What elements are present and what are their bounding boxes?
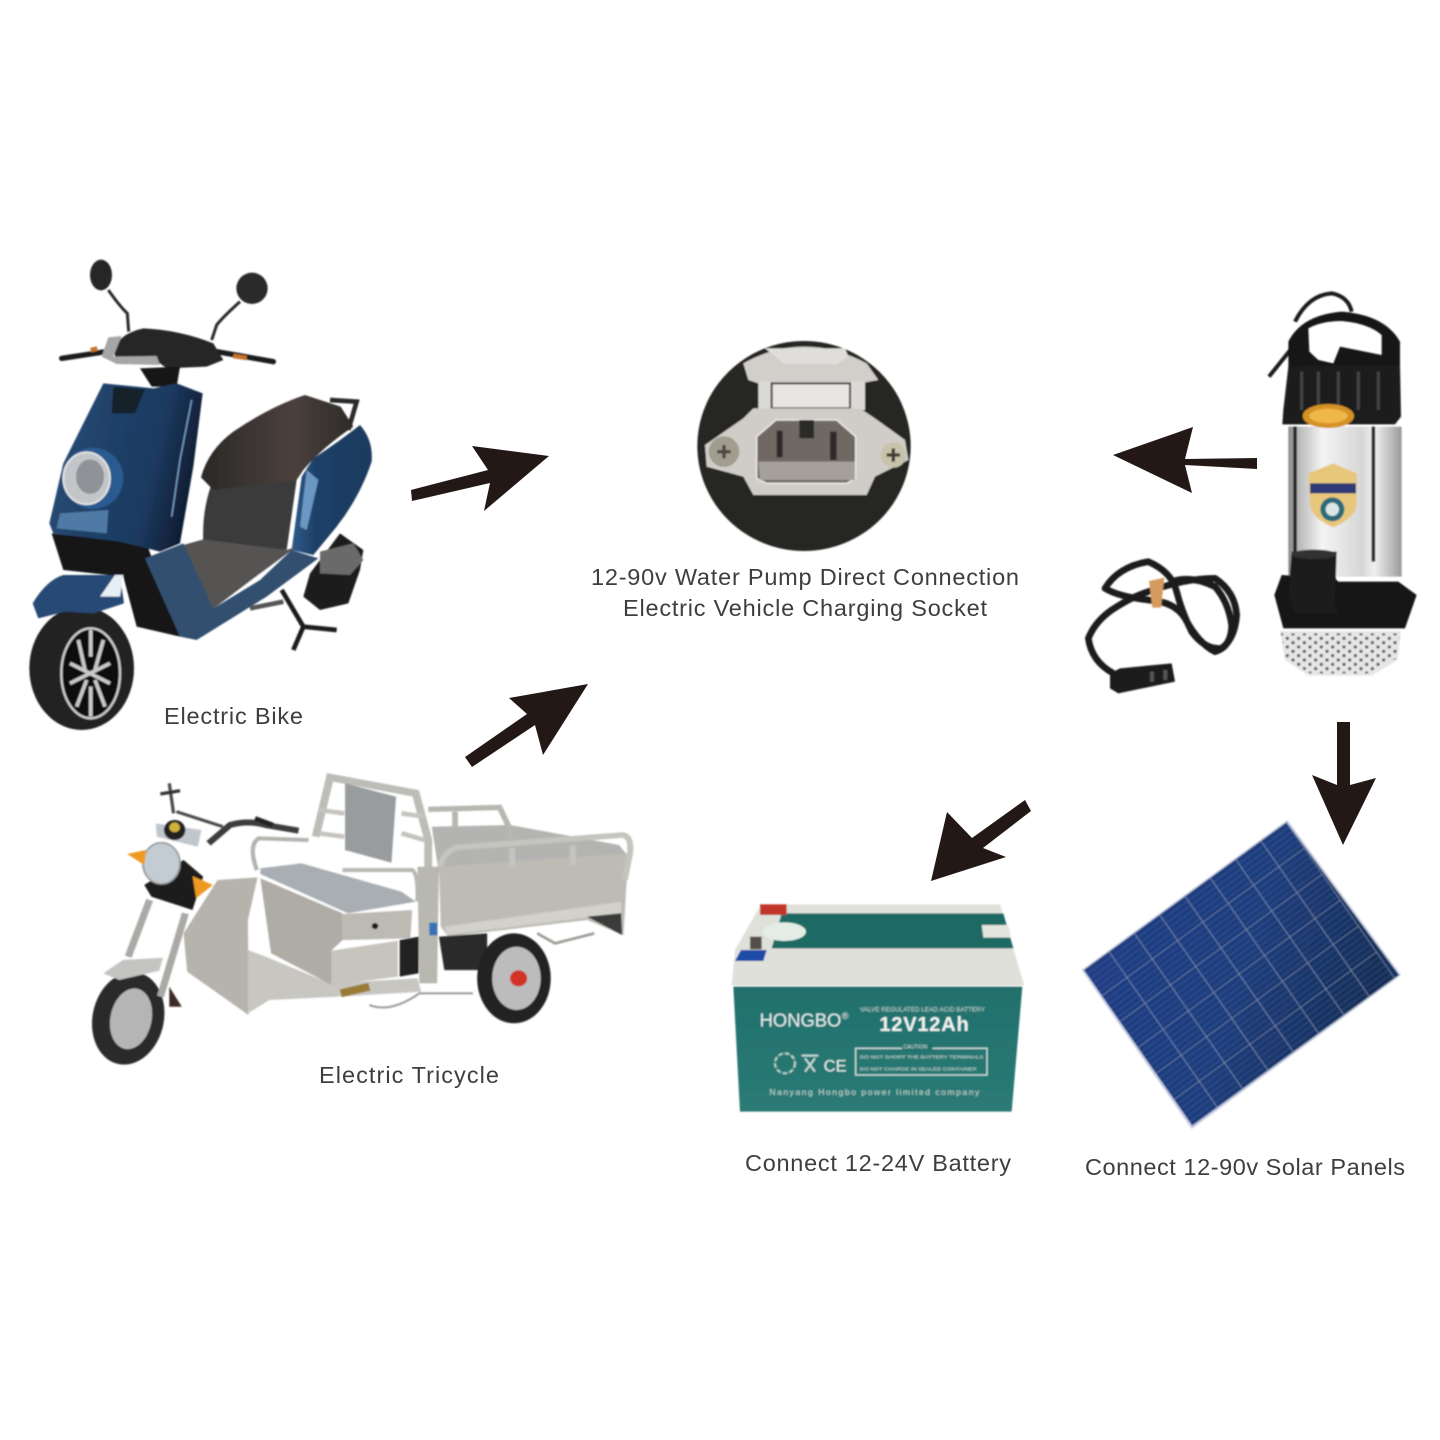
- arrow: pump to socket: [1113, 427, 1257, 493]
- socket opening: [757, 420, 856, 483]
- compliance icons: CE: [824, 1057, 847, 1076]
- shield badge: [1308, 463, 1357, 527]
- icon: electric bike: [29, 260, 372, 730]
- lid: [743, 347, 878, 383]
- label: battery: Connect 12-24V Battery: [745, 1150, 1011, 1176]
- floorboard: [183, 539, 297, 610]
- pump head: [1282, 365, 1401, 424]
- rear suspension: [537, 933, 594, 943]
- handle: [1288, 312, 1400, 368]
- front face: [733, 987, 1022, 1112]
- head bracket: [144, 860, 203, 910]
- front wheel: [84, 967, 172, 1070]
- label: solar panels: Connect 12-90v Solar Panels: [1085, 1154, 1405, 1180]
- outlet: [1288, 552, 1338, 613]
- head ribs: [1302, 372, 1378, 410]
- motor and stand: [250, 533, 363, 650]
- panel cells: [1084, 822, 1395, 1126]
- label: electric tricycle: Electric Tricycle: [319, 1062, 499, 1088]
- caption: socket: [591, 564, 1019, 621]
- icon: charging socket: [697, 341, 911, 551]
- icon: battery: [732, 904, 1024, 1112]
- cargo bottom band: [444, 902, 621, 935]
- indicators: [127, 850, 213, 898]
- manufacturer: Nanyang Hongbo power limited company: [769, 1087, 980, 1097]
- instrument cluster: [156, 820, 201, 847]
- white tag: [982, 925, 1011, 938]
- lid recess: [772, 913, 1013, 948]
- terminal post: [750, 937, 762, 949]
- seat: [201, 395, 353, 490]
- socket floor: [758, 462, 855, 480]
- red terminal: [760, 904, 787, 915]
- dark circular background: [697, 341, 911, 551]
- cord loops: [1088, 562, 1237, 673]
- rear cargo rail: [428, 807, 510, 857]
- backrest: [316, 777, 428, 917]
- round sticker: [763, 922, 806, 941]
- caution box: DO NOT SHORT THE BATTERY TERMINALS: [860, 1055, 984, 1061]
- outlet rim: [1291, 550, 1337, 559]
- caution box: CAUTION: [903, 1045, 927, 1051]
- rear wheel: [477, 933, 551, 1023]
- plug: [1110, 663, 1175, 693]
- registered mark: ®: [842, 1011, 849, 1021]
- blue sticker: [429, 923, 437, 935]
- icon: power cord: [1088, 562, 1237, 693]
- steel body: [1288, 427, 1402, 577]
- caption: socket: 12-90v Water Pump Direct Connection: [591, 564, 1019, 590]
- panel base: [1084, 822, 1399, 1126]
- brand: HONGBO: [760, 1010, 841, 1031]
- cord band: [1149, 578, 1164, 608]
- lid tab: [765, 348, 848, 364]
- legshield: [184, 877, 257, 1015]
- arrow: pump to solar panel: [1312, 722, 1376, 845]
- pins: [777, 420, 837, 460]
- under-seat compartment: [203, 480, 297, 550]
- front wheel: [29, 607, 134, 730]
- icon: water pump: [1269, 293, 1417, 676]
- cargo top rail: [440, 835, 630, 880]
- front shield: [49, 383, 203, 552]
- top label: [1303, 404, 1354, 428]
- strainer holes: [1281, 633, 1400, 673]
- cargo interior: [432, 825, 628, 873]
- rear body panel: [292, 425, 372, 555]
- seat box: [253, 838, 419, 985]
- headlight: [143, 843, 180, 884]
- right screw: [881, 442, 906, 468]
- cable loop: [1269, 293, 1352, 377]
- rear rack: [330, 400, 357, 430]
- chassis under cargo: [439, 933, 487, 970]
- rating: 12V12Ah: [879, 1014, 969, 1036]
- cargo side panel: [439, 853, 628, 937]
- frame panel: [145, 543, 318, 640]
- panel frame: [1082, 820, 1401, 1129]
- front fender: [103, 958, 163, 980]
- hinge shadow: [772, 383, 850, 408]
- base: [1274, 575, 1417, 628]
- center post: [417, 867, 439, 983]
- caption: socket: Electric Vehicle Charging Socket: [623, 595, 987, 621]
- brake cable and lock: [341, 987, 473, 1007]
- cargo bottom shadow: [587, 913, 622, 935]
- fender highlight: [100, 575, 123, 597]
- battery type: VALVE REGULATED LEAD ACID BATTERY: [860, 1007, 986, 1014]
- icon: solar panel: [1082, 820, 1401, 1129]
- arrow: tricycle to socket: [465, 684, 588, 767]
- caution box: [856, 1044, 987, 1075]
- label: electric bike: Electric Bike: [164, 703, 303, 729]
- socket flange: [705, 408, 908, 495]
- caution box: DO NOT CHARGE IN SEALED CONTAINER: [860, 1066, 977, 1072]
- hinge: [758, 382, 865, 410]
- headlight: [62, 448, 123, 509]
- dark underbody: [52, 533, 180, 637]
- rear fork guard: [169, 987, 182, 1007]
- front fender: [33, 575, 124, 618]
- blue terminal: [735, 950, 767, 961]
- strainer: [1280, 631, 1401, 676]
- steel body stripes: [1295, 427, 1373, 568]
- front fork: [128, 900, 185, 997]
- mirrors: [90, 260, 268, 340]
- handlebar: [62, 328, 273, 387]
- compliance icons: [775, 1053, 847, 1076]
- icon: electric tricycle: [84, 777, 630, 1070]
- left screw: [709, 436, 739, 467]
- battery lid: [732, 904, 1024, 986]
- arrow: solar panel to battery: [931, 800, 1031, 881]
- arrow: bike to socket: [411, 446, 549, 511]
- shield highlights: [57, 387, 318, 533]
- handlebars: [160, 783, 299, 843]
- floorboard: [248, 950, 421, 1013]
